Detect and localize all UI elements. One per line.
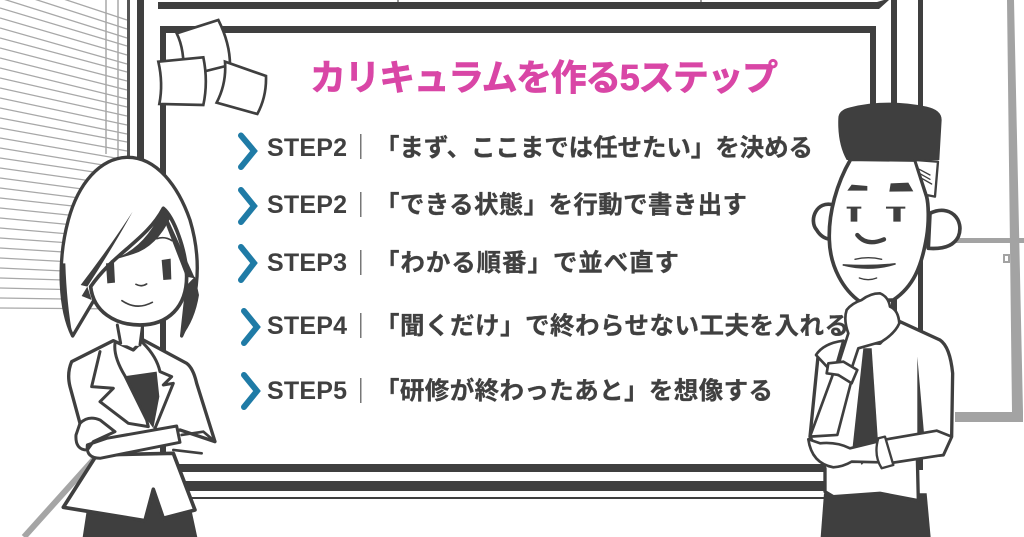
step 2 row (241, 190, 747, 222)
chevron 3 (241, 247, 254, 280)
sticky notes (158, 20, 266, 114)
step 2 label: STEP2 (267, 191, 347, 219)
shoulder curl (816, 341, 843, 370)
whiteboard frame (127, 0, 923, 499)
step 4 label: STEP4 (267, 312, 347, 340)
woman character (60, 157, 215, 537)
right wall window frame (955, 0, 1024, 422)
chevron 5 (244, 375, 257, 407)
side hair (915, 160, 938, 197)
step 3 text: 「わかる順番」で並べ直す (375, 249, 679, 277)
nose, mouth, eyebrow (122, 238, 172, 306)
hair back (61, 157, 197, 336)
wrist cuff (876, 437, 893, 468)
fist (839, 293, 899, 368)
cuff (173, 432, 215, 453)
lapels (92, 343, 173, 428)
eyes (106, 259, 171, 283)
hair (838, 103, 942, 160)
shirt fold (917, 357, 924, 434)
eyebrows (847, 183, 913, 192)
neck (117, 323, 142, 346)
step 1 text: 「まず、ここまでは任せたい」を決める (375, 134, 813, 162)
shirt (810, 322, 953, 501)
nose (857, 235, 884, 242)
step 5 label: STEP5 (267, 377, 347, 405)
ears (813, 204, 960, 249)
face (829, 159, 928, 302)
window blinds (0, 0, 127, 309)
lower arm and hand (808, 431, 952, 467)
sleeve cuff (827, 362, 857, 383)
hair tips (60, 263, 199, 337)
step 3 row (241, 247, 679, 280)
step 2 text: 「できる状態」を行動で書き出す (375, 191, 747, 219)
mouth (843, 264, 895, 268)
chevron 2 (241, 190, 254, 222)
step 1 row (241, 134, 813, 167)
floor line (24, 458, 95, 537)
step 1 label: STEP2 (267, 134, 347, 162)
inner top (126, 372, 159, 428)
trousers (821, 493, 931, 537)
eyes (847, 207, 905, 222)
crossed arms (76, 418, 180, 458)
fringe (81, 207, 195, 300)
step 5 row (244, 375, 773, 407)
jacket lower (63, 453, 195, 521)
step 4 text: 「聞くだけ」で終わらせない工夫を入れる (375, 312, 849, 340)
raised forearm (810, 373, 852, 437)
skirt (83, 483, 197, 537)
chevron 4 (244, 311, 257, 343)
tie (853, 348, 878, 465)
jacket upper (69, 340, 215, 447)
step 5 text: 「研修が終わったあと」を想像する (375, 376, 773, 405)
face (91, 208, 187, 325)
title: カリキュラムを作る5ステップ (310, 57, 778, 98)
step 3 label: STEP3 (267, 249, 347, 277)
step 4 row (244, 311, 849, 343)
man character (808, 103, 960, 537)
chevron 1 (241, 136, 254, 167)
